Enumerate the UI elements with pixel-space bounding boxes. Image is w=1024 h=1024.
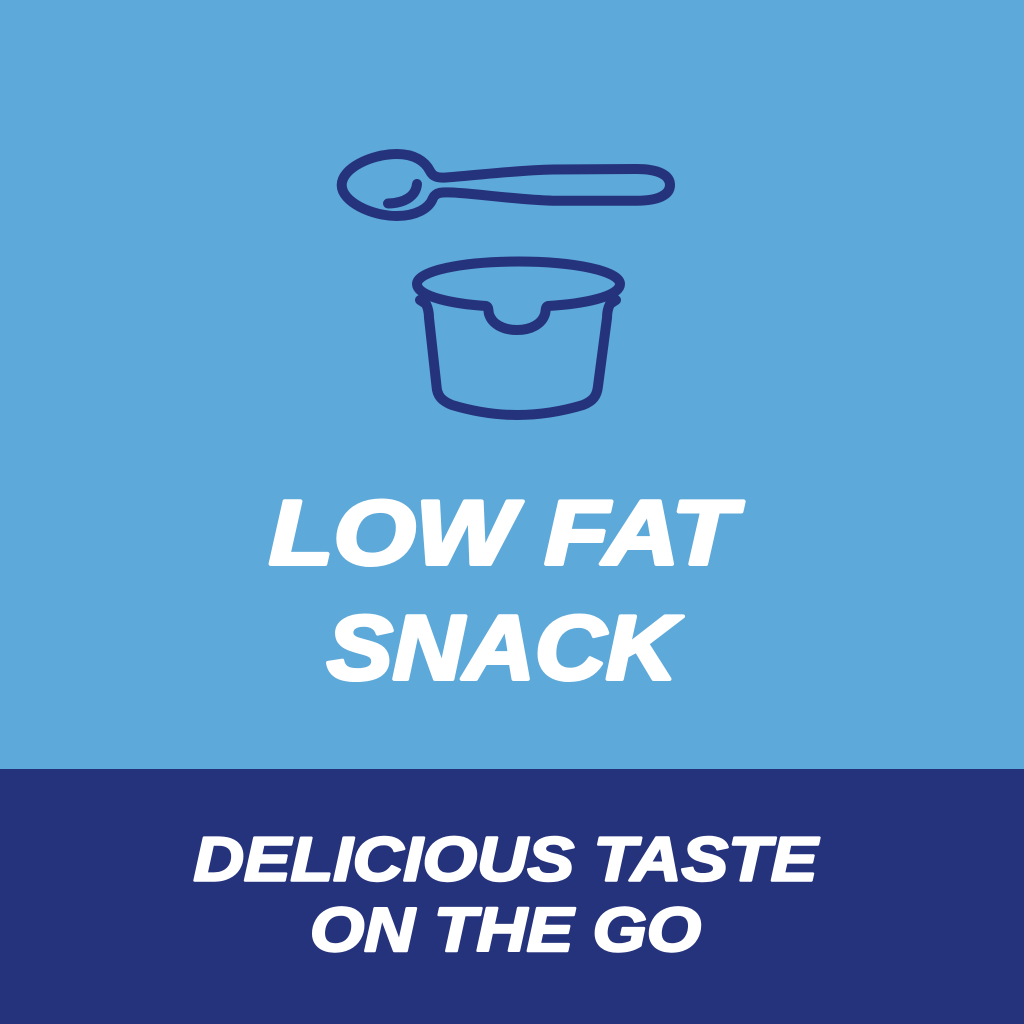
icon: yogurt cup (417, 262, 620, 415)
heading: low fat snack: LOW FAT (269, 483, 743, 584)
light blue background panel (0, 0, 1024, 769)
heading: low fat snack: SNACK (327, 598, 684, 699)
heading: low fat snack (269, 483, 743, 699)
icon: spoon (342, 154, 670, 216)
tagline: delicious taste on the go: DELICIOUS TASTE (194, 826, 819, 894)
tagline: delicious taste on the go: ON THE GO (310, 896, 701, 965)
dark blue bottom band (0, 769, 1024, 1024)
tagline: delicious taste on the go (194, 826, 819, 965)
